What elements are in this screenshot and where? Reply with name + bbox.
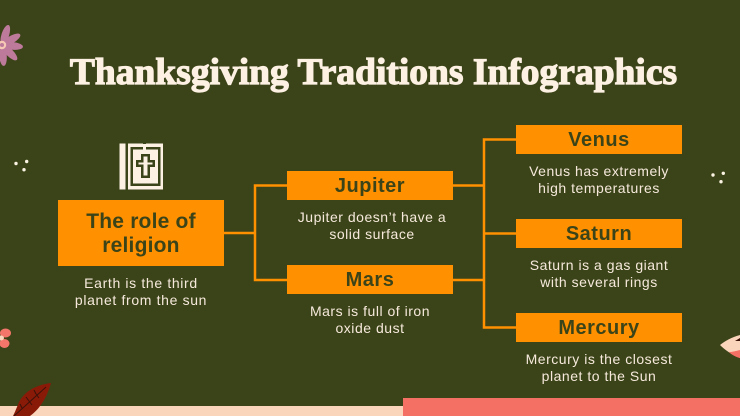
text: mars: [310, 303, 430, 336]
decoration: dots right: [711, 172, 725, 184]
text: mars: Mars is full of iron: [310, 303, 430, 319]
bottom band: coral: [403, 398, 740, 416]
decoration: right-edge shape: [720, 335, 740, 358]
decoration: dots left: [14, 160, 28, 172]
text: venus: Venus has extremely: [529, 163, 669, 179]
main box: the role of religion: religion: [102, 234, 180, 257]
text: earth: [75, 275, 207, 308]
text: venus: [529, 163, 669, 196]
text: earth: Earth is the third: [84, 275, 198, 291]
box: venus: [516, 125, 682, 154]
box: venus: Venus: [568, 129, 630, 151]
text: mercury: [526, 351, 672, 384]
box: mercury: [516, 313, 682, 342]
text: saturn: [530, 257, 668, 290]
text: earth: planet from the sun: [75, 292, 207, 308]
text: saturn: with several rings: [540, 274, 658, 290]
text: mercury: Mercury is the closest: [526, 351, 672, 367]
decoration: coral flower: [0, 328, 11, 348]
text: saturn: Saturn is a gas giant: [530, 257, 668, 273]
decoration: red leaf: [13, 383, 51, 416]
box: jupiter: [287, 171, 453, 200]
text: jupiter: solid surface: [329, 226, 415, 242]
text: mercury: planet to the Sun: [542, 368, 656, 384]
text: venus: high temperatures: [538, 180, 660, 196]
text: jupiter: [298, 209, 446, 242]
icon: prayer book with cross: [120, 144, 163, 190]
box: mars: [287, 265, 453, 294]
title: Thanksgiving Traditions Infographics: [70, 52, 677, 93]
text: mars: oxide dust: [335, 320, 405, 336]
main box: the role of religion: [58, 200, 224, 266]
decoration: pink flower: [0, 25, 23, 66]
bottom band: peach: [0, 406, 403, 416]
box: mars: Mars: [346, 269, 394, 291]
box: saturn: [516, 219, 682, 248]
box: mercury: Mercury: [558, 317, 640, 339]
main box: the role of religion: The role of: [86, 210, 196, 233]
text: jupiter: Jupiter doesn’t have a: [298, 209, 446, 225]
box: jupiter: Jupiter: [335, 175, 405, 197]
box: saturn: Saturn: [566, 223, 632, 245]
